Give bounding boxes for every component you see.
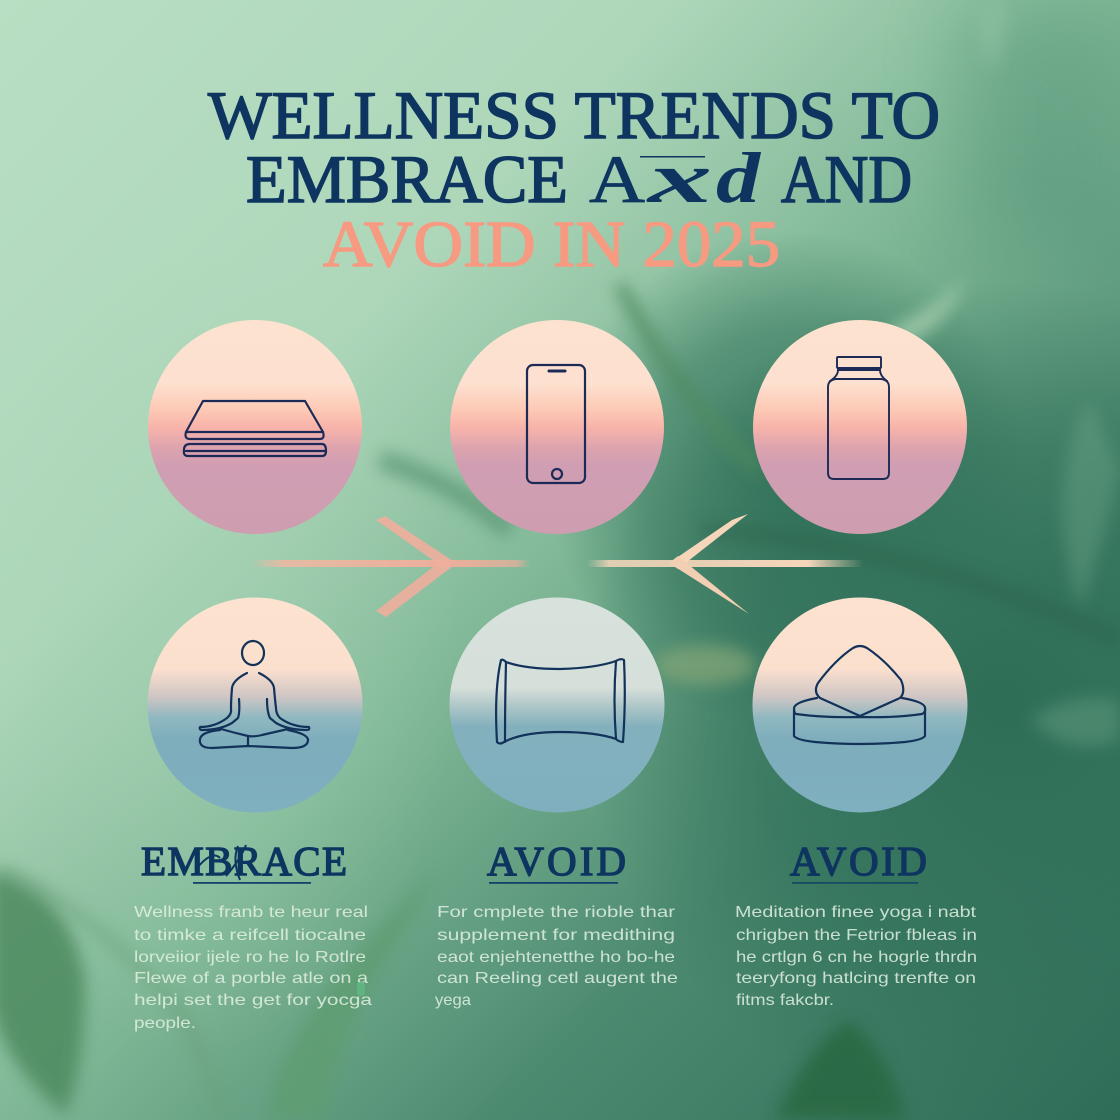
title [208,77,940,281]
circle: pillow icon [450,598,664,812]
text block: avoid center: For cmplete the rioble thar [437,904,676,921]
title: WELLNESS TRENDS TO [208,77,940,153]
circle: smartphone icon [450,320,664,534]
text block: avoid center: supplement for medithing [437,927,675,944]
circle: yoga mat icon [148,320,362,534]
text block: avoid center: yega [435,992,471,1009]
text block: embrace: Flewe of a porble atle on a [134,970,368,987]
title: x [646,138,712,218]
title: d [716,138,761,218]
text block: avoid right: Meditation finee yoga i nabt [735,904,977,921]
circle: meditation figure icon [148,598,362,812]
text block: avoid right: chrigben the Fetrior fbleas in [736,927,977,944]
heading: avoid center: AVOID [487,838,626,884]
text block: embrace: Wellness franb te heur real [134,904,368,921]
title: AND [781,141,912,217]
text block: avoid right: he crtlgn 6 cn he hogrle thrdn [736,949,977,966]
text block: embrace: lorveiior ijele ro he lo Rotlre [134,949,366,966]
circle: supplement bottle icon [753,320,967,534]
text block: embrace: people. [134,1015,196,1032]
text block: embrace [134,904,372,1032]
circle: cushion icon [752,598,968,812]
text block: avoid right [735,904,977,1009]
arrow: avoid, pointing left [587,514,863,614]
text block: avoid right: teeryfong hatlcing trenfte on [736,970,976,987]
text block: embrace: helpi set the get for yocga [134,992,372,1009]
heading: avoid right: AVOID [790,838,927,884]
small green cup mark [357,982,365,996]
text block: avoid center: eaot enjehtenetthe ho bo-he [437,949,675,966]
title: EMBRACE [246,141,568,217]
text block: embrace: to timke a reifcell tiocalne [134,927,366,944]
arrow: embrace, pointing right [250,516,530,617]
heading: embrace: EMBRACE [141,838,347,884]
title: A [589,141,645,217]
text block: avoid center: can Reeling cetl augent the [437,970,678,987]
title: AVOID IN 2025 [323,208,780,281]
text block: avoid right: fitms fakcbr. [736,992,834,1009]
text block: avoid center [435,904,678,1009]
